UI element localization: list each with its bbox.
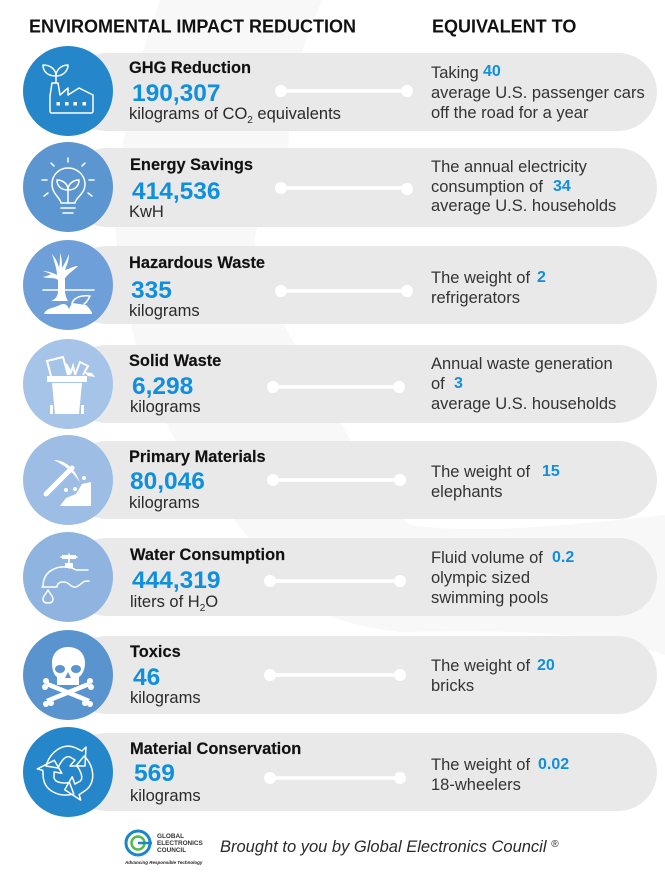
panel: material conservation: [23, 727, 657, 817]
value: 444,319: [132, 567, 221, 594]
equivalent text: [431, 463, 560, 501]
connector: [267, 474, 406, 486]
unit: O: [205, 593, 218, 611]
equivalent text: Annual waste generation: [431, 355, 613, 373]
unit: kilograms: [129, 494, 200, 512]
panel: toxics: [23, 630, 657, 720]
equivalent text: bricks: [431, 677, 474, 695]
equivalent text: 40: [483, 63, 501, 80]
title: Water Consumption: [130, 546, 285, 564]
logo: Global Electronics Council: COUNCIL: [157, 847, 186, 854]
equivalent text: 3: [454, 375, 463, 392]
equivalent text: swimming pools: [431, 589, 548, 607]
value: 6,298: [132, 373, 193, 400]
equivalent text: [431, 269, 546, 307]
title: Material Conservation: [130, 740, 301, 758]
panel: primary materials: [23, 435, 657, 525]
equivalent text: 20: [537, 657, 555, 674]
value: 569: [134, 760, 175, 787]
equivalent text: average U.S. passenger cars: [431, 84, 645, 102]
icon: faucet: [23, 532, 113, 622]
equivalent text: The weight of: [431, 269, 530, 287]
equivalent text: [431, 657, 555, 695]
equivalent text: elephants: [431, 483, 503, 501]
equivalent text: average U.S. households: [431, 197, 616, 215]
equivalent text: consumption of: [431, 178, 543, 196]
equivalent text: The weight of: [431, 756, 530, 774]
value: 80,046: [130, 468, 205, 495]
value: 190,307: [132, 80, 221, 107]
connector: [267, 381, 405, 393]
equivalent text: 15: [542, 463, 560, 480]
panel: water consumption: [23, 532, 657, 622]
title: GHG Reduction: [129, 59, 251, 77]
panel: solid waste: [23, 339, 657, 429]
icon: skull and crossbones: [23, 630, 113, 720]
connector: [275, 285, 413, 297]
value: 335: [131, 277, 172, 304]
equivalent text: 18-wheelers: [431, 776, 521, 794]
unit: equivalents: [253, 105, 341, 123]
connector: [275, 85, 413, 97]
equivalent text: The weight of: [431, 463, 530, 481]
title: Solid Waste: [129, 352, 221, 370]
unit: liters of H: [130, 593, 200, 611]
logo: Global Electronics Council: Advancing Responsible Technology: [124, 860, 203, 865]
value: 46: [133, 664, 160, 691]
title: Hazardous Waste: [129, 254, 265, 272]
equivalent text: average U.S. households: [431, 395, 616, 413]
panel: GHG reduction: [23, 46, 657, 136]
value: 414,536: [132, 178, 221, 205]
equivalent text: Fluid volume of: [431, 549, 543, 567]
equivalent text: 0.02: [538, 756, 569, 773]
equivalent text: olympic sized: [431, 569, 530, 587]
unit: kilograms: [130, 689, 201, 707]
unit: kilograms: [130, 398, 201, 416]
equivalent text: [431, 63, 645, 122]
equivalent text: 2: [537, 269, 546, 286]
icon: waste bin: [23, 339, 113, 429]
unit: kilograms: [129, 302, 200, 320]
equivalent text: The annual electricity: [431, 158, 588, 176]
equivalent text: [431, 549, 574, 607]
unit: 2: [247, 115, 253, 126]
title: Primary Materials: [129, 448, 266, 466]
unit: KwH: [129, 203, 164, 221]
icon: factory with plant: [23, 46, 113, 136]
connector: [264, 669, 406, 681]
heading: equivalent to: EQUIVALENT TO: [432, 16, 576, 36]
equivalent text: [431, 756, 569, 794]
unit: kilograms: [130, 787, 201, 805]
title: Toxics: [130, 643, 181, 661]
equivalent text: [431, 158, 616, 215]
equivalent text: of: [431, 375, 445, 393]
icon: recycling arrows: [23, 727, 113, 817]
footer credit: ®: [551, 839, 559, 850]
footer credit: Brought to you by Global Electronics Council: [220, 838, 547, 856]
heading: environmental impact reduction: ENVIROMENTAL IMPACT REDUCTION: [29, 16, 356, 36]
panel: energy savings: [23, 142, 657, 232]
connector: [275, 182, 413, 195]
unit: kilograms of CO: [129, 105, 247, 123]
equivalent text: 0.2: [552, 549, 574, 566]
icon: light bulb with plant: [23, 142, 113, 232]
connector: [264, 772, 406, 784]
icon: pickaxe and rock: [23, 435, 113, 525]
equivalent text: Taking: [431, 64, 479, 82]
equivalent text: 34: [553, 178, 571, 195]
equivalent text: [431, 355, 616, 413]
icon: dead tree and spill: [23, 240, 113, 330]
logo: Global Electronics Council: ELECTRONICS: [157, 840, 204, 847]
logo: Global Electronics Council: [124, 831, 204, 865]
title: Energy Savings: [130, 156, 253, 174]
unit: 2: [200, 603, 206, 614]
logo: Global Electronics Council: GLOBAL: [157, 833, 184, 840]
equivalent text: off the road for a year: [431, 104, 589, 122]
connector: [264, 575, 406, 587]
equivalent text: refrigerators: [431, 289, 520, 307]
equivalent text: The weight of: [431, 657, 530, 675]
panel: hazardous waste: [23, 240, 657, 330]
